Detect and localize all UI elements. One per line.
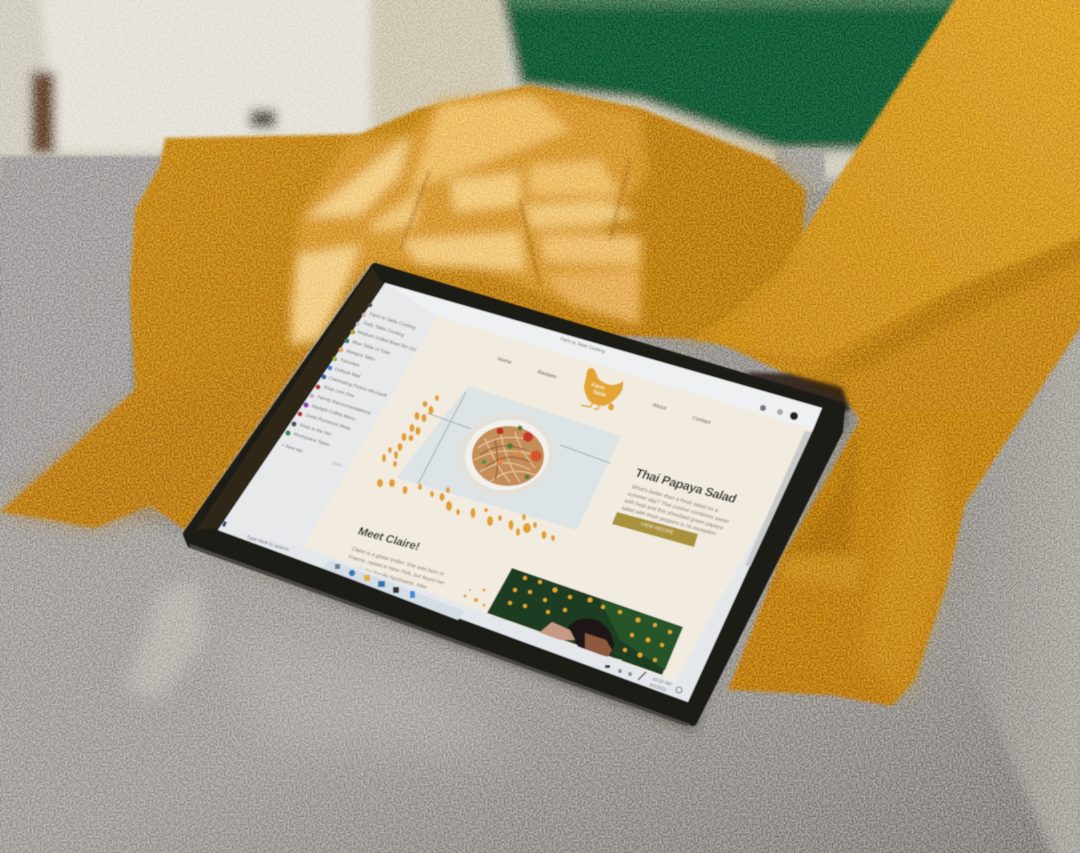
browser sidebar tabs: + New tab [280, 442, 304, 454]
portrait photo [487, 568, 683, 675]
tablet body [187, 267, 841, 722]
taskbar icons [335, 564, 340, 569]
green crate [500, 0, 965, 150]
recipe description: salad with fresh peppers is no exception. [620, 505, 719, 538]
browser sidebar tabs: Celebrating Fiction Microsoft [327, 375, 389, 399]
screen [218, 283, 822, 702]
blanket: right lower mass [690, 235, 1080, 706]
blanket: upper right fold [695, 0, 1080, 360]
dots near photo [464, 588, 486, 606]
browser sidebar tabs: Mangos Tales [345, 348, 377, 363]
about text: home in the Pacific Northwest. After [343, 562, 428, 591]
blanket: main left drape [0, 85, 805, 530]
browser title bar: Farm to Table Cooking [560, 336, 606, 354]
recipe description: What's better than a fresh salad on a [630, 484, 720, 514]
browser sidebar tabs: Favorites [339, 357, 361, 369]
browser sidebar tabs [218, 283, 437, 547]
icon: chicken logo [581, 368, 623, 411]
button: view recipe [612, 512, 698, 547]
navigation: About [651, 402, 668, 412]
browser sidebar tabs: Workspace Tasks [292, 431, 331, 448]
scrollbar [745, 431, 812, 567]
bowl [452, 406, 560, 504]
browser sidebar tabs: Great Romance Ideas [304, 412, 352, 432]
navigation [496, 356, 712, 426]
food photo [396, 386, 621, 530]
tablet shadow on blanket at top right corner [745, 372, 850, 420]
browser sidebar tabs: Skylight Coffee Menu [310, 403, 357, 423]
button: view recipe: VIEW RECIPE [639, 521, 675, 536]
browser sidebar tabs: Shop Line One [322, 384, 356, 399]
browser sidebar tabs: Shop in the Vet [298, 422, 332, 438]
browser sidebar tabs: Medium Grilled Bowl Sin Girl [356, 329, 417, 353]
left drape shadow [0, 340, 290, 528]
browser sidebar tabs: Outlook Mail [333, 366, 361, 380]
recipe description [620, 484, 730, 538]
about text [343, 546, 446, 591]
browser title bar [375, 283, 822, 430]
person [567, 618, 614, 655]
right armrest [942, 318, 1080, 853]
sofa seat shadow line [0, 476, 240, 560]
web page background [303, 316, 813, 682]
tablet [187, 267, 841, 726]
sunlight on seat [125, 580, 205, 700]
browser sidebar tabs: Blue Table of Tolet [351, 339, 392, 357]
browser sidebar tabs: Farm to Table Cooking [368, 311, 417, 331]
about text: Claire is a globe trotter. She was born in [350, 546, 445, 578]
navigation: Recipes [536, 369, 558, 380]
navigation: Home [496, 356, 513, 366]
papaya salad [472, 426, 544, 486]
white planter [40, 0, 370, 150]
recipe description: summer day? Thai cuisine combines sweet [626, 491, 730, 525]
tablet left bezel reflection [196, 268, 384, 530]
heading: Thai Papaya Salad: Thai Papaya Salad [633, 466, 739, 506]
wall section [372, 0, 502, 130]
taskbar: Type here to search [245, 534, 290, 553]
orange brush dots around photo [377, 395, 555, 541]
wooden leg [31, 72, 55, 154]
fold shadows [815, 238, 1080, 380]
background: room behind the sofa [0, 0, 1080, 180]
left back cushion [0, 156, 165, 490]
browser sidebar tabs: Family Recommendations [316, 394, 372, 417]
tablet shadow [186, 380, 850, 732]
taskbar: 10:10 AM [652, 676, 672, 687]
browser title bar: https://www.farmtotablecooking.com [399, 305, 478, 333]
about text: France, raised in New York, but found her [347, 554, 446, 587]
browser sidebar tabs: Daily Table Cooking [362, 320, 406, 339]
recipe description: with heat and this shredded green papaya [622, 498, 725, 532]
browser sidebar tabs: Save [332, 460, 344, 468]
icon: chicken logo: Farm [590, 382, 606, 392]
profile icons [760, 405, 766, 411]
heading: Meet Claire: Meet Claire! [356, 526, 422, 553]
icon: chicken logo: Table [591, 389, 607, 399]
shaded drape at right of sunlit area [650, 125, 805, 340]
taskbar [218, 521, 688, 702]
sunlit patches on blanket [288, 90, 650, 345]
bezel bottom reflection [190, 544, 690, 726]
navigation: Contact [691, 415, 712, 426]
taskbar: 8/1/2021 [649, 682, 668, 692]
